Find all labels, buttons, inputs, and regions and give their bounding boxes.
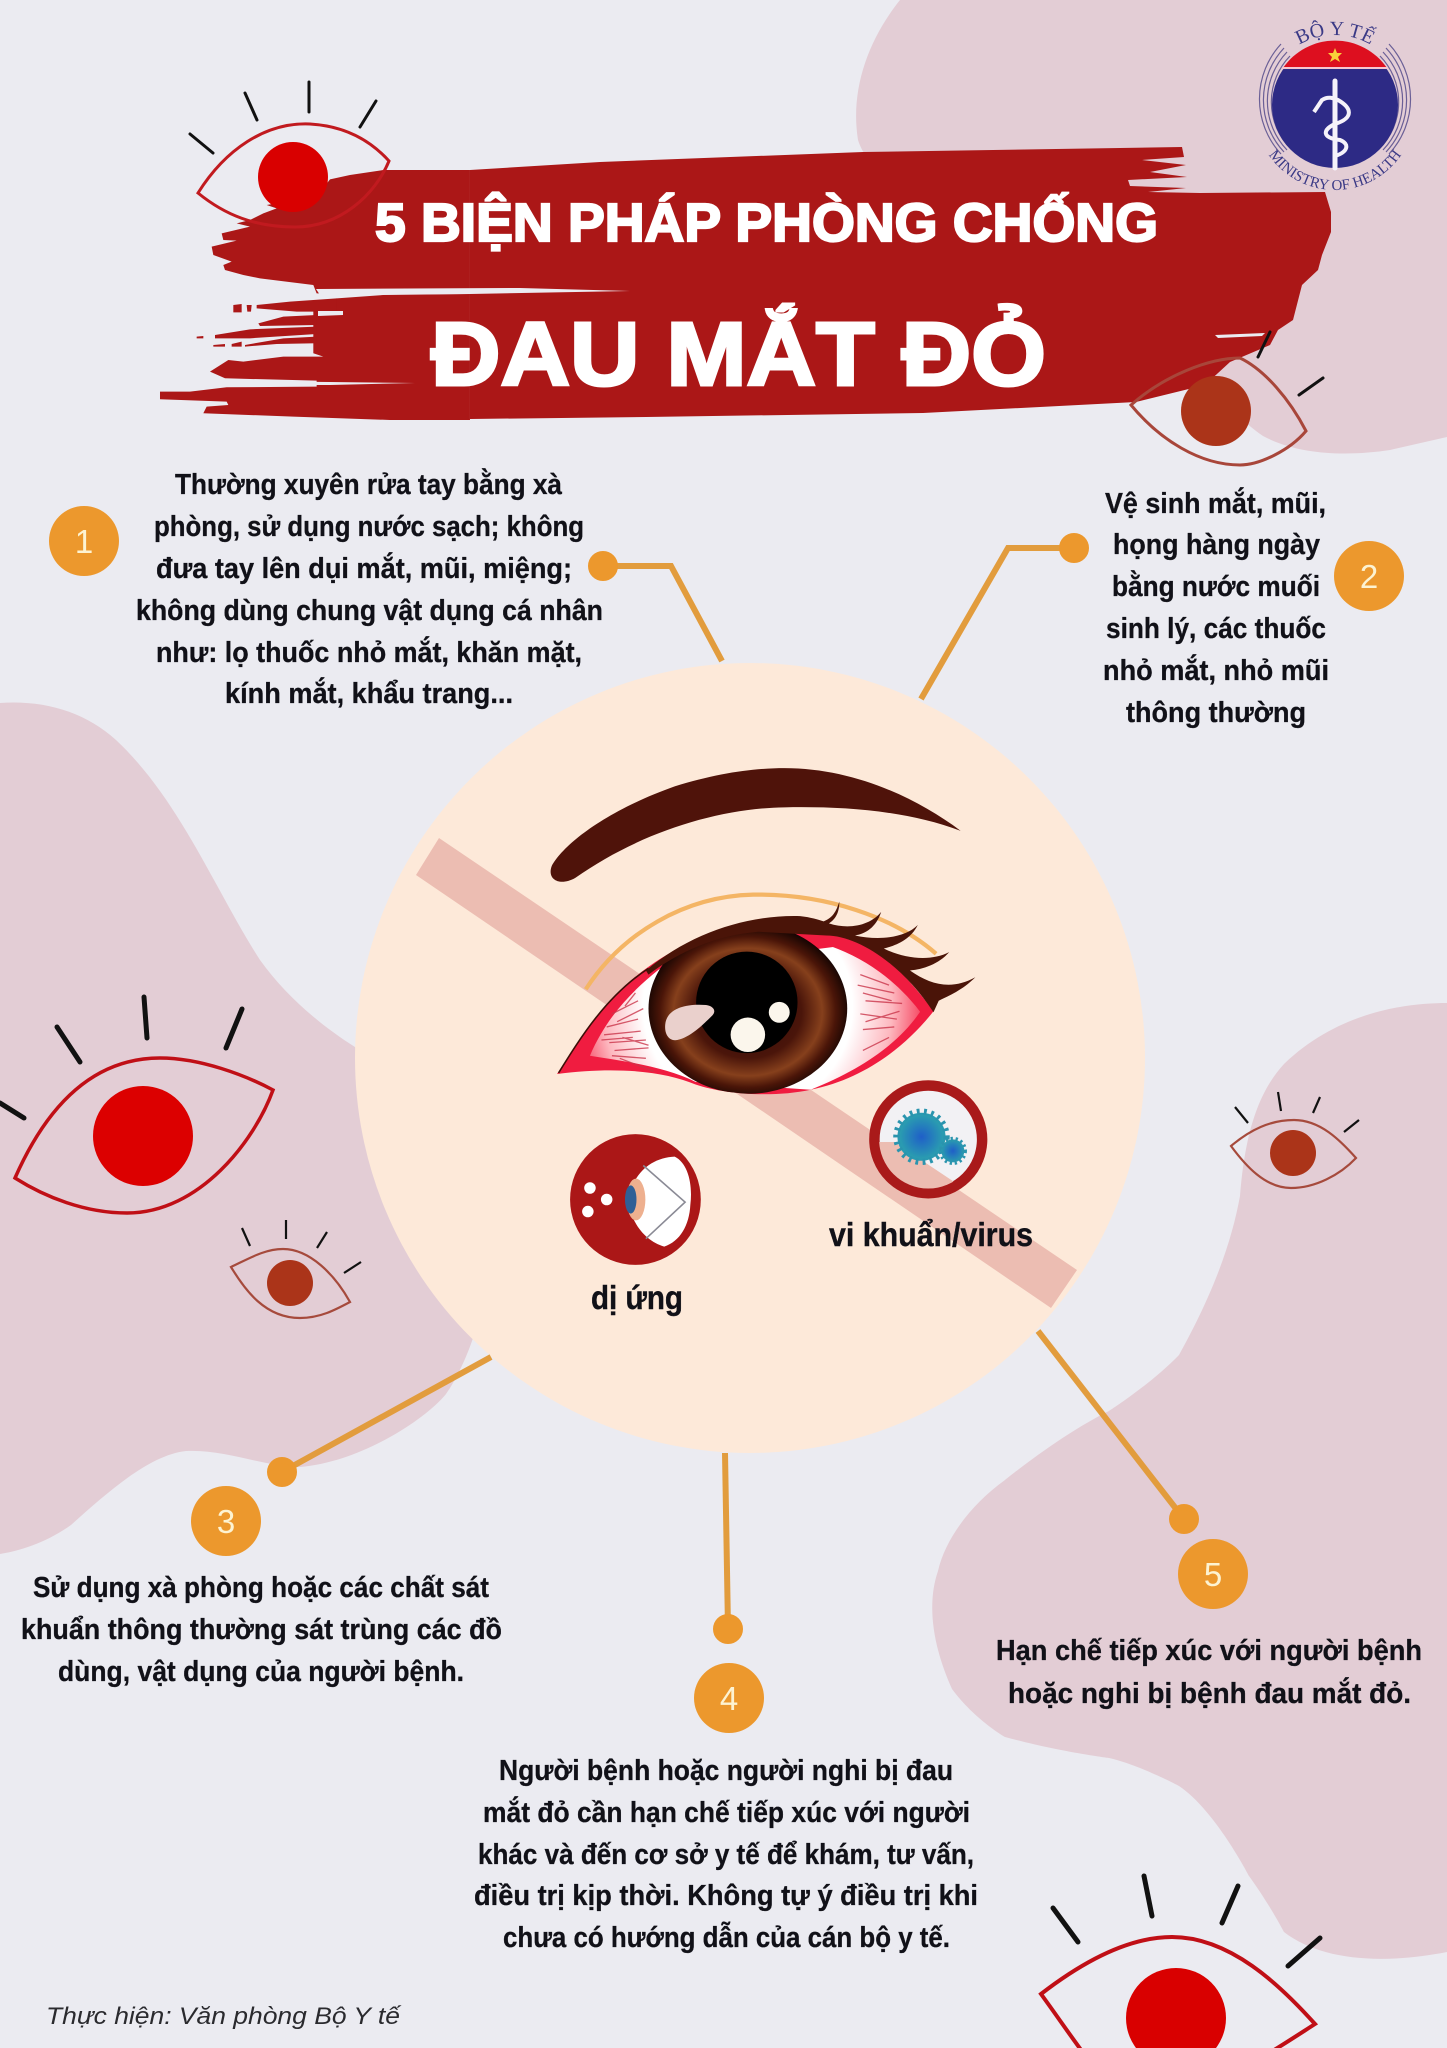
decorative eye: small left [231, 1220, 361, 1318]
icon: virus [869, 1080, 988, 1198]
step 5 number: 5 [1204, 1556, 1222, 1593]
step 2 text: thông thường [1126, 697, 1306, 729]
background blob: right [932, 1003, 1447, 1959]
eye white and red corners [557, 932, 934, 1094]
upper eyelid and lashes [646, 901, 975, 1012]
step 3 number: 3 [217, 1503, 235, 1540]
iris [649, 923, 847, 1094]
step 1 text: như: lọ thuốc nhỏ mắt, khăn mặt, [156, 635, 582, 669]
logo: Ministry of Health [1258, 20, 1412, 190]
left lid outline [559, 968, 649, 1073]
step 2 text: nhỏ mắt, nhỏ mũi [1103, 653, 1329, 687]
central circle with all illustration [355, 663, 1145, 1453]
step 4 text: chưa có hướng dẫn của cán bộ y tế. [503, 1920, 950, 1954]
banner brush streaks [226, 288, 1265, 385]
step 4 text: Người bệnh hoặc người nghi bị đau [499, 1755, 953, 1787]
connector 2 [921, 536, 1086, 699]
step 5 text [996, 1635, 1422, 1710]
decorative eye: small right [1231, 1092, 1359, 1188]
decorative eye: large bottom right [1041, 1876, 1320, 2048]
decorative eye: large left [0, 997, 273, 1213]
step 1 text: kính mắt, khẩu trang... [225, 676, 513, 710]
credit line: Thực hiện: Văn phòng Bộ Y tế [46, 2003, 402, 2030]
step 4 number: 4 [720, 1680, 738, 1717]
step 5 number [1178, 1539, 1248, 1609]
veins [601, 975, 902, 1071]
illustration: red eye [549, 768, 975, 1111]
banner: red brush stroke [160, 147, 1331, 420]
step 1 number: 1 [75, 523, 93, 560]
step 1 number [49, 506, 119, 576]
step 3 text: khuẩn thông thường sát trùng các đồ [21, 1614, 502, 1646]
background blob: top right [856, 0, 1447, 453]
step 4 text: khác và đến cơ sở y tế để khám, tư vấn, [478, 1839, 974, 1871]
eyebrow [551, 768, 961, 882]
title line 2: ĐAU MẮT ĐỎ [431, 303, 1046, 405]
step 4 text [474, 1755, 978, 1954]
connector 4 [716, 1453, 740, 1641]
label: dị ứng: dị ứng [591, 1279, 683, 1316]
step 1 text [136, 467, 603, 710]
label: vi khuẩn/virus: vi khuẩn/virus [829, 1216, 1033, 1253]
title line 1: 5 BIỆN PHÁP PHÒNG CHỐNG [375, 192, 1158, 253]
highlights [665, 1002, 790, 1052]
eyelid crease [586, 895, 936, 989]
step 2 text: bằng nước muối [1112, 569, 1320, 603]
step 3 number [191, 1486, 261, 1556]
decorative eye: top left [190, 82, 389, 227]
icon: allergy eye [570, 1134, 701, 1265]
background blob: left [0, 703, 480, 1554]
connector 5 [1038, 1331, 1196, 1531]
banner main right part [470, 147, 1331, 419]
title [375, 192, 1158, 405]
step 3 text [21, 1572, 502, 1688]
step 4 text: điều trị kịp thời. Không tự ý điều trị khi [474, 1880, 978, 1912]
step 1 text: đưa tay lên dụi mắt, mũi, miệng; [156, 551, 572, 585]
step 2 text: Vệ sinh mắt, mũi, [1105, 486, 1326, 520]
pupil [696, 952, 798, 1053]
step 2 text: sinh lý, các thuốc [1106, 613, 1326, 645]
decorative eye: right of banner [1131, 332, 1323, 465]
step 4 text: mắt đỏ cần hạn chế tiếp xúc với người [483, 1795, 970, 1829]
connector 1 [591, 554, 722, 661]
step 2 number: 2 [1360, 558, 1378, 595]
step 1 text: không dùng chung vật dụng cá nhân [136, 595, 603, 627]
step 2 text [1103, 486, 1329, 729]
logo: Ministry of Health: MINISTRY OF HEALTH [1268, 149, 1402, 190]
step 4 number [694, 1663, 764, 1733]
diagonal strip across circle [416, 838, 1077, 1308]
step 5 text: hoặc nghi bị bệnh đau mắt đỏ. [1008, 1676, 1411, 1710]
banner streak fragments [197, 298, 337, 347]
connector 3 [270, 1357, 491, 1484]
step 3 text: dùng, vật dụng của người bệnh. [58, 1656, 464, 1688]
logo: Ministry of Health: BỘ Y TẾ [1294, 20, 1378, 44]
step 2 number [1334, 541, 1404, 611]
step 2 text: họng hàng ngày [1113, 529, 1320, 561]
step 1 text: phòng, sử dụng nước sạch; không [154, 511, 584, 543]
banner lower body [160, 294, 470, 420]
step 5 text: Hạn chế tiếp xúc với người bệnh [996, 1635, 1422, 1667]
step 1 text: Thường xuyên rửa tay bằng xà [175, 467, 563, 501]
banner upper body [212, 170, 470, 293]
step 3 text: Sử dụng xà phòng hoặc các chất sát [33, 1572, 489, 1604]
